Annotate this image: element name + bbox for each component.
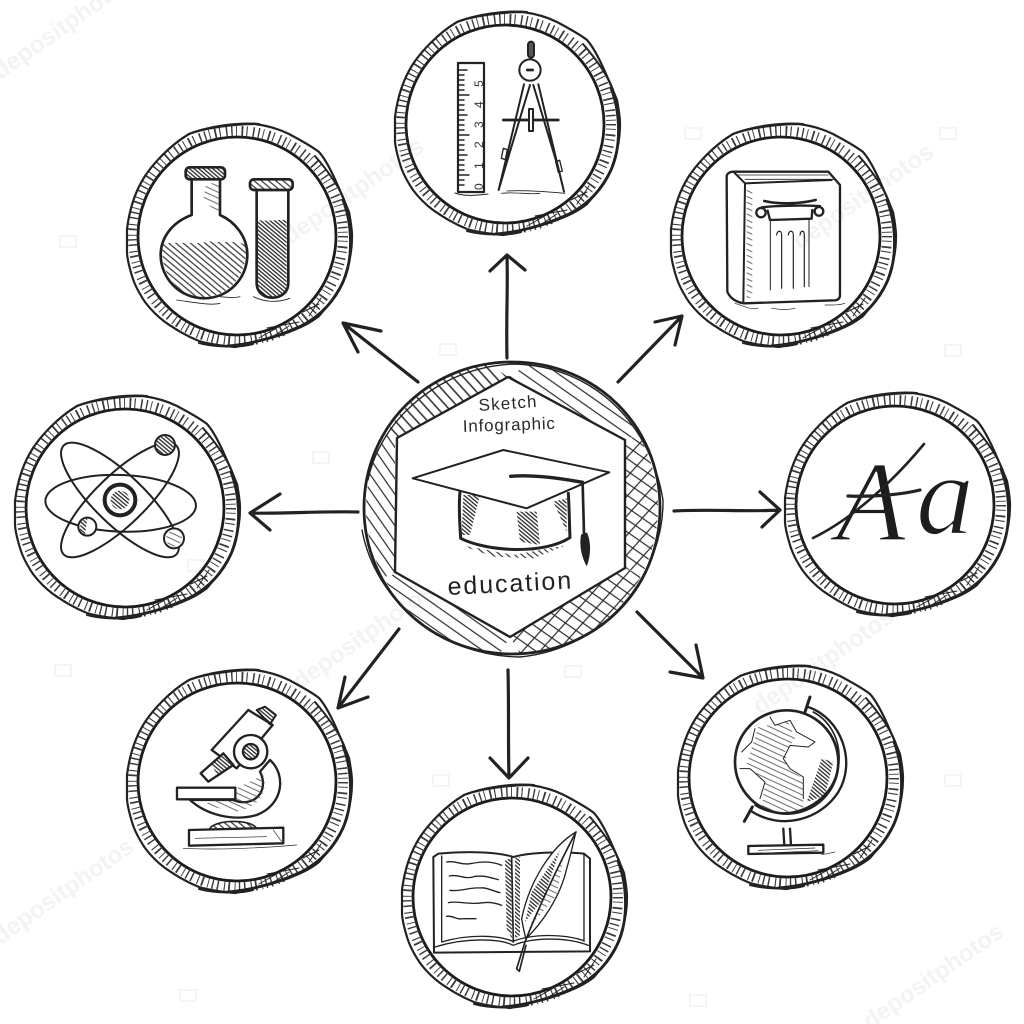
arrow: south-west	[338, 629, 399, 708]
arrow: east	[674, 492, 780, 527]
icon: microscope	[177, 707, 297, 849]
arrow: north-west	[343, 323, 418, 382]
heading: sketch infographic: Sketch	[478, 392, 538, 415]
icon: globe	[735, 697, 846, 855]
arrow: north-east	[618, 316, 682, 382]
icon: test tube	[250, 179, 293, 301]
arrow: south-east	[637, 612, 703, 678]
icon: classical book	[727, 172, 845, 310]
watermark: depositphotos	[748, 603, 899, 720]
icon: calligraphy Aa	[813, 432, 974, 565]
icon: feather quill	[517, 832, 576, 971]
panel: globe	[678, 665, 903, 889]
icon: ruler: 5	[472, 80, 486, 87]
heading: sketch infographic	[462, 392, 556, 436]
icon: open book	[433, 852, 590, 953]
panel: atom	[15, 395, 240, 619]
icon: ruler: 3	[472, 121, 486, 128]
icon: ruler: 1	[472, 162, 486, 169]
icon: ruler	[455, 63, 488, 195]
watermark: depositphotos	[788, 138, 939, 255]
arrow: up	[490, 255, 525, 358]
arrow: west	[250, 494, 358, 530]
icon: graduation cap	[413, 450, 609, 565]
panel: letters Aa	[785, 392, 1010, 616]
icon: ruler: 2	[472, 141, 486, 148]
panel: chemistry flasks	[127, 123, 352, 347]
panel: book with column	[671, 123, 896, 347]
icon: ruler: 0	[472, 183, 486, 190]
icon: round flask	[161, 167, 247, 304]
icon: calligraphy Aa: a	[916, 432, 974, 560]
watermark: depositphotos	[288, 578, 439, 695]
icon: calligraphy Aa: A	[829, 438, 907, 565]
watermark: depositphotos	[278, 133, 429, 250]
icon: ruler: 4	[472, 101, 486, 108]
panel: open book and quill	[402, 784, 627, 1008]
panel: ruler and compass	[395, 11, 620, 235]
hexagon	[395, 377, 625, 637]
panel: microscope	[127, 669, 352, 893]
label: education: education	[447, 566, 574, 601]
arrows	[250, 255, 780, 778]
icon: atom	[44, 428, 197, 572]
arrow: south	[490, 670, 528, 778]
heading: sketch infographic: Infographic	[462, 414, 556, 436]
central panel: education	[361, 360, 664, 658]
icon: compass	[499, 42, 565, 194]
